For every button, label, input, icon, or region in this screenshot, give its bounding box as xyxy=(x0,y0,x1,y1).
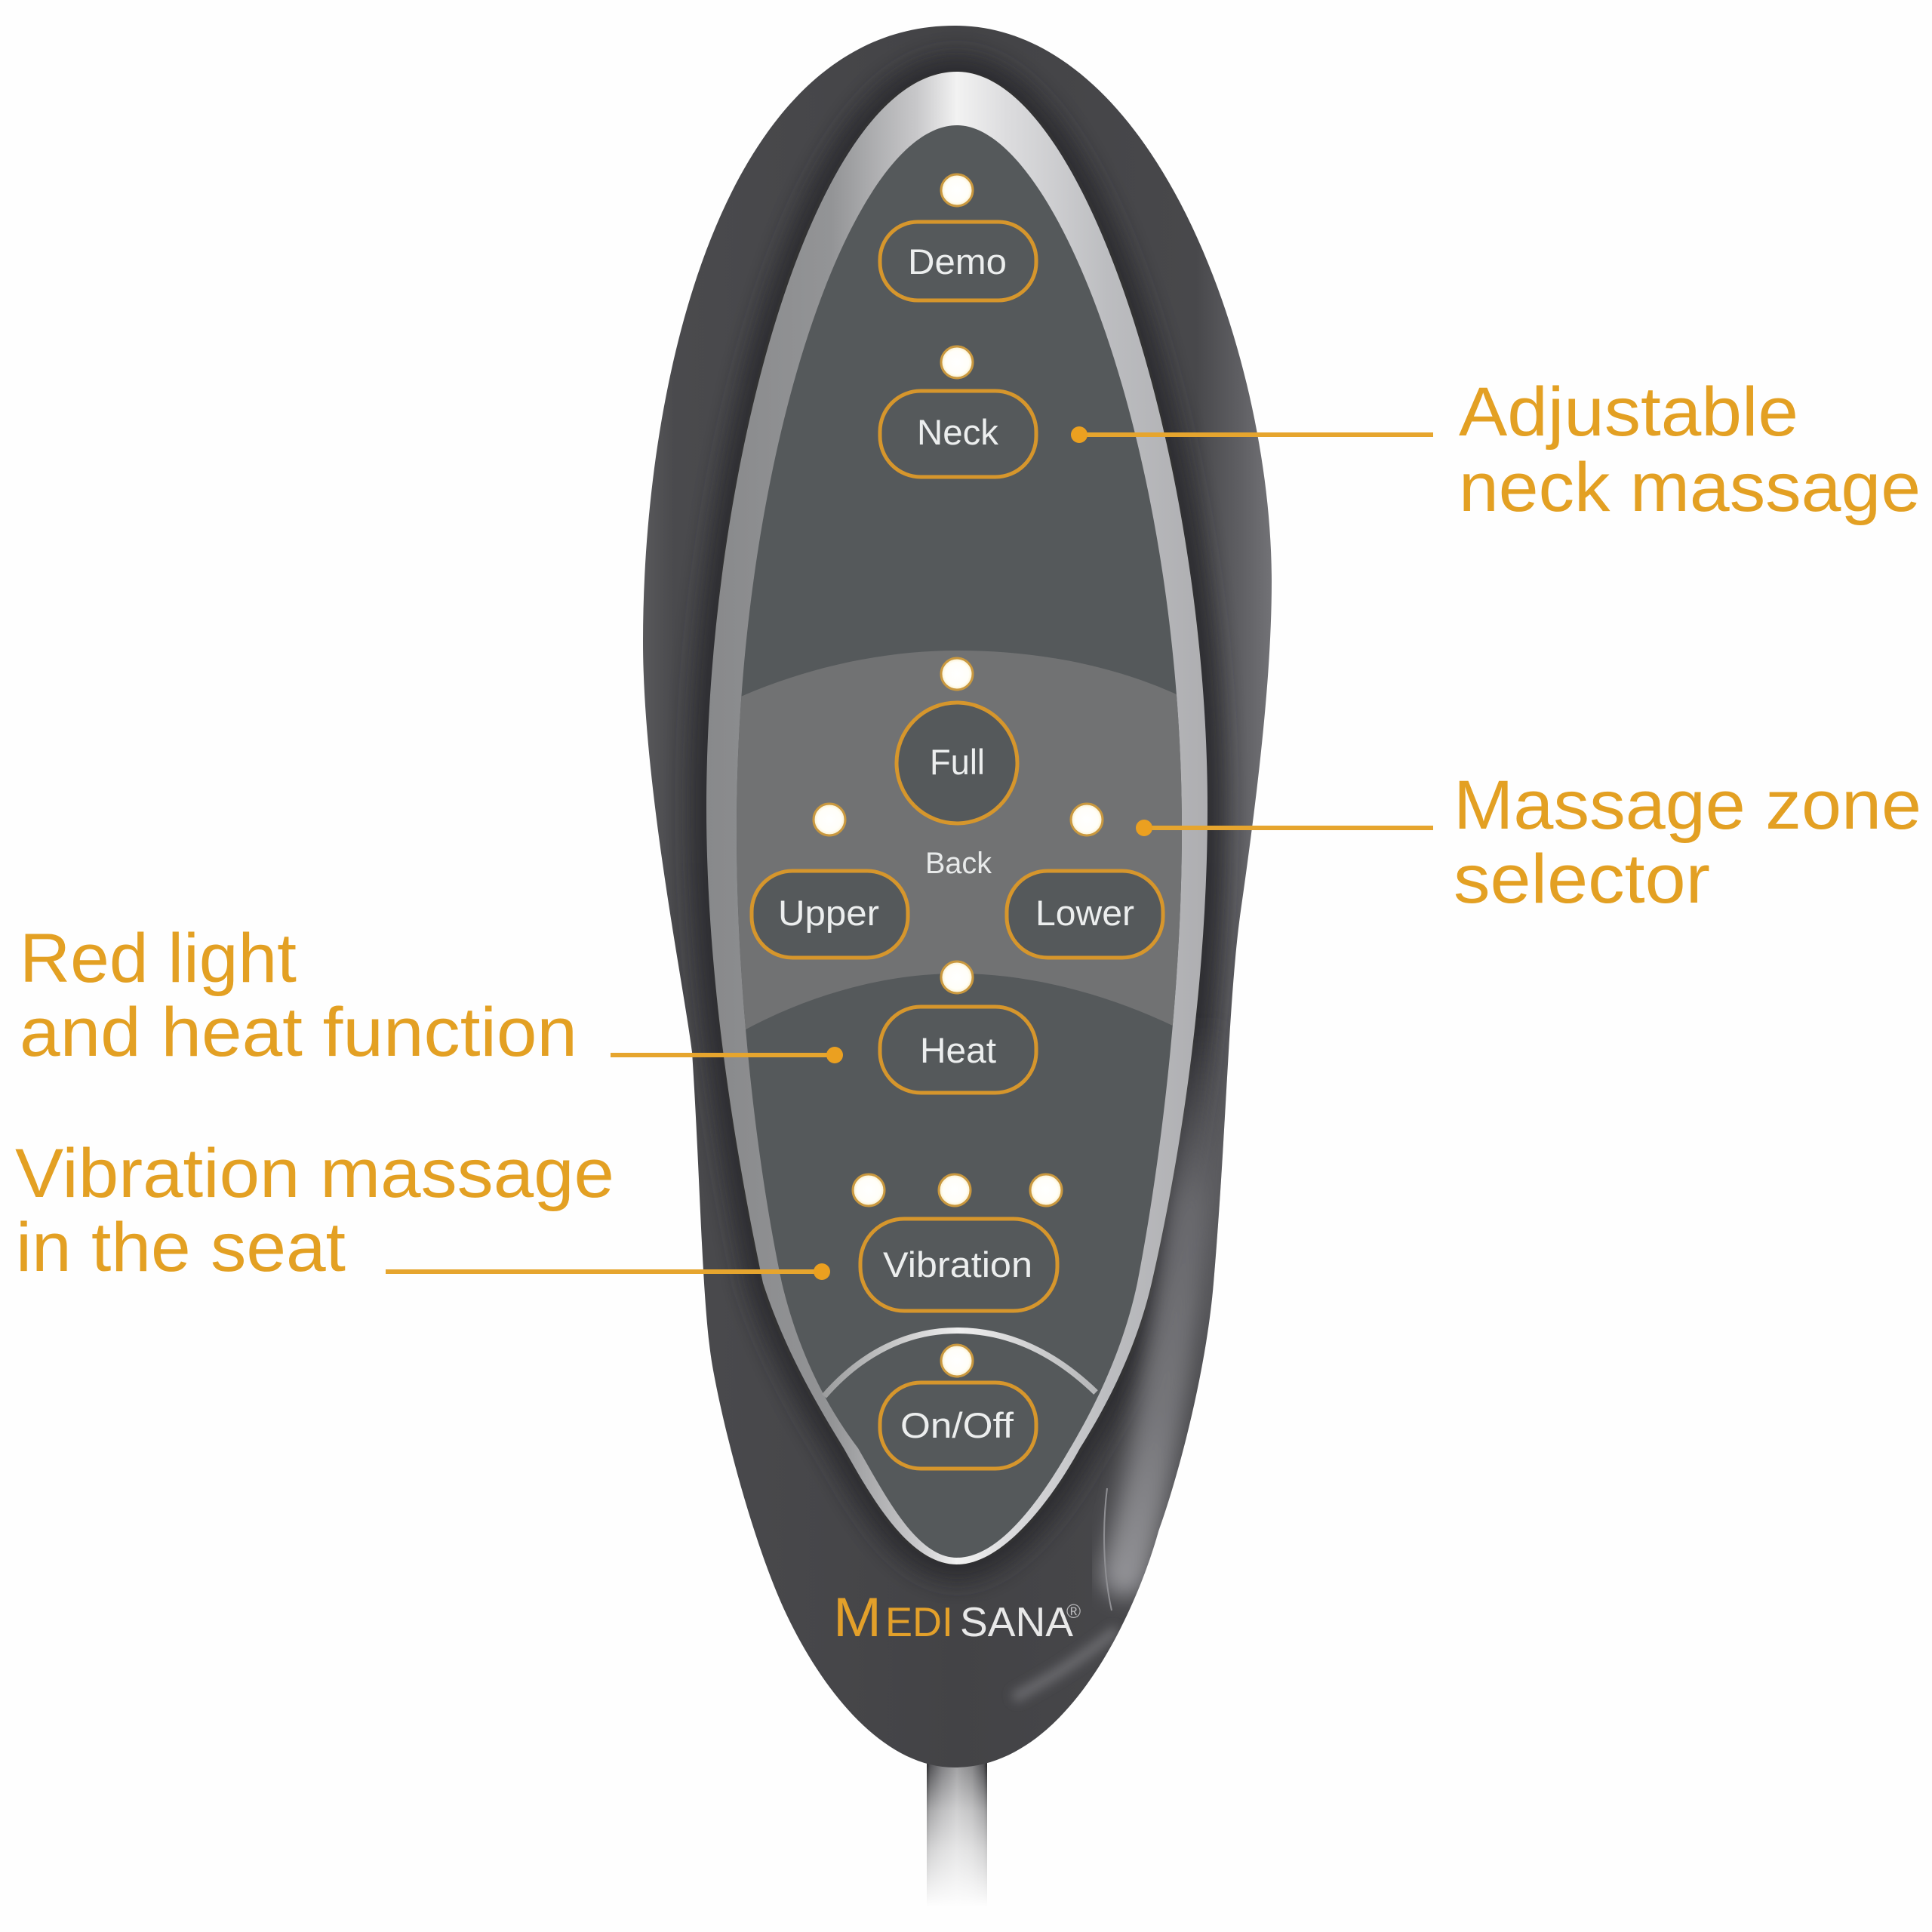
button: Upper: Upper xyxy=(778,893,879,933)
button: Demo xyxy=(880,222,1036,300)
Medisana logo: SANA xyxy=(960,1598,1073,1645)
body shading xyxy=(706,72,1208,1698)
Medisana logo: M xyxy=(833,1587,881,1648)
power arc xyxy=(824,1331,1096,1396)
button: Upper xyxy=(752,871,908,958)
callout: Massage zone selector: selector xyxy=(1454,841,1710,918)
button: Neck: Neck xyxy=(917,412,998,452)
remote control xyxy=(643,26,1272,1767)
button: On/Off xyxy=(880,1383,1036,1469)
callout: Massage zone selector xyxy=(1136,767,1921,918)
cable xyxy=(924,1758,990,1909)
button: On/Off: On/Off xyxy=(900,1405,1014,1445)
button: Vibration xyxy=(860,1219,1057,1311)
Medisana logo xyxy=(833,1587,1081,1648)
indicator lights xyxy=(814,174,1103,1377)
button: Lower xyxy=(1007,871,1163,958)
button: Vibration: Vibration xyxy=(883,1244,1032,1284)
button: Neck xyxy=(880,391,1036,477)
remote body xyxy=(643,26,1272,1767)
button: Heat: Heat xyxy=(920,1030,996,1070)
callout: Adjustable neck massage: Adjustable xyxy=(1459,374,1798,451)
button: Lower: Lower xyxy=(1035,893,1134,933)
callout: Red light and heat function: Red light xyxy=(20,920,297,997)
Medisana logo: EDI xyxy=(885,1598,953,1645)
silver ring xyxy=(706,72,1208,1564)
Medisana logo: ® xyxy=(1066,1600,1081,1623)
back massage zone xyxy=(724,651,1192,1041)
callout: Massage zone selector: Massage zone xyxy=(1454,767,1921,844)
button: Demo: Demo xyxy=(908,242,1007,281)
callout: Adjustable neck massage xyxy=(1071,374,1921,526)
label: Back: Back xyxy=(925,847,992,880)
button: Full xyxy=(897,703,1017,823)
button: Full: Full xyxy=(930,742,985,782)
callout: Vibration massage in the seat: Vibration massage xyxy=(15,1135,614,1212)
callout: Vibration massage in the seat: in the seat xyxy=(16,1209,346,1286)
control panel xyxy=(737,125,1182,1558)
callout: Red light and heat function xyxy=(20,920,843,1071)
callout: Red light and heat function: and heat function xyxy=(20,994,577,1071)
callout: Adjustable neck massage: neck massage xyxy=(1459,449,1921,526)
callout: Vibration massage in the seat xyxy=(15,1135,830,1286)
button: Heat xyxy=(880,1007,1036,1093)
